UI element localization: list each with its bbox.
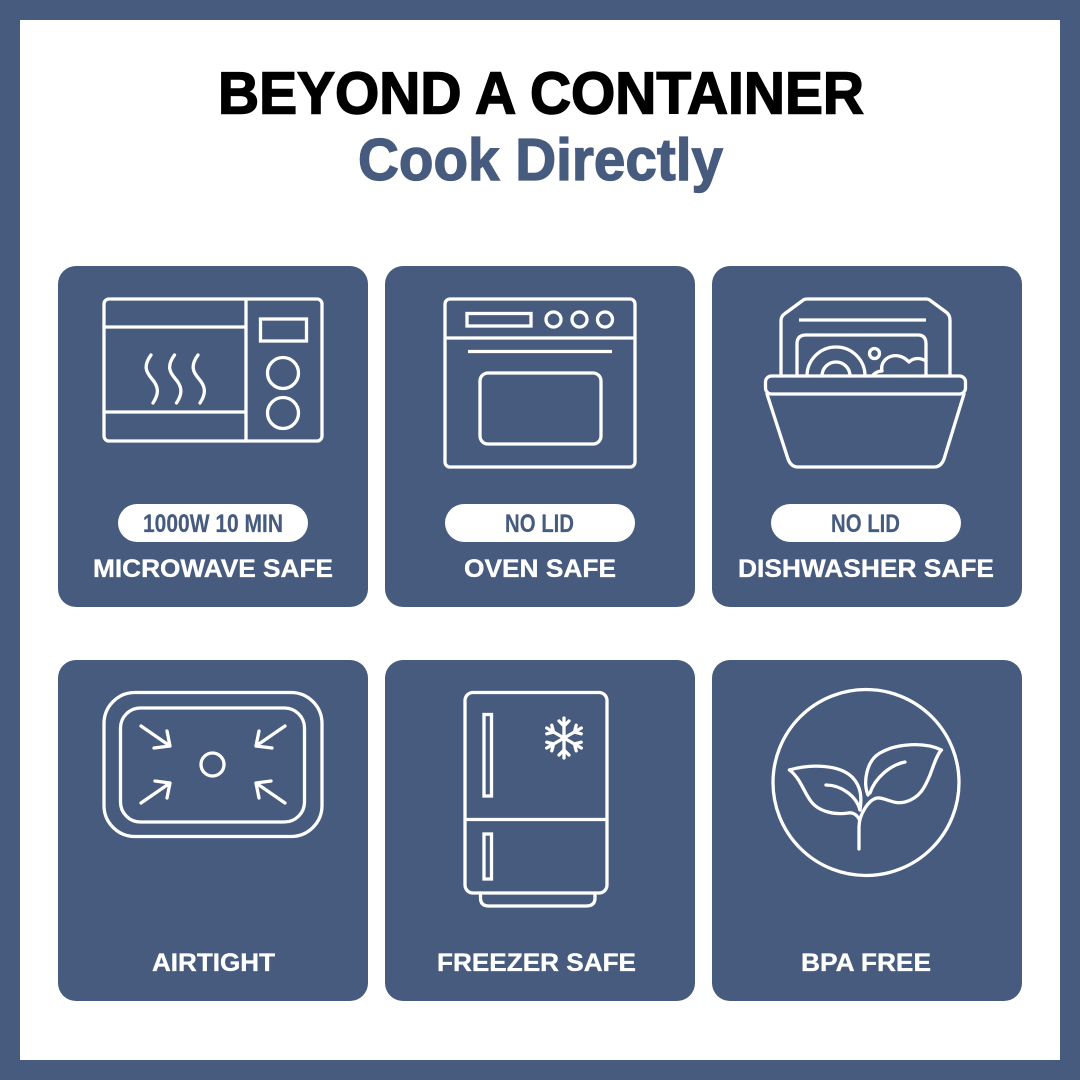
pill: no lid: NO LID: [831, 510, 900, 538]
label: oven safe: OVEN SAFE: [464, 555, 616, 583]
panel: freezer safe: [385, 660, 695, 1001]
title: BEYOND A CONTAINER: [218, 60, 864, 126]
title: Cook Directly: [358, 127, 723, 193]
pill: 1000W 10 MIN: [118, 504, 308, 542]
label: microwave safe: MICROWAVE SAFE: [93, 555, 333, 583]
icon: snowflake: [544, 718, 584, 758]
panel: microwave safe: [58, 266, 368, 607]
icon: dishwasher: [766, 299, 966, 467]
pill: 1000W 10 MIN: 1000W 10 MIN: [143, 510, 283, 538]
panel: dishwasher safe: [712, 266, 1022, 607]
pill: no lid: [445, 504, 635, 542]
pill: no lid: NO LID: [505, 510, 574, 538]
label: airtight: AIRTIGHT: [152, 949, 275, 977]
label: freezer safe: FREEZER SAFE: [437, 949, 636, 977]
icon: microwave: [104, 299, 322, 441]
icon: oven: [445, 299, 635, 467]
label: bpa free: BPA FREE: [801, 949, 931, 977]
icon: leaf in circle: [773, 690, 959, 876]
label: dishwasher safe: DISHWASHER SAFE: [738, 555, 994, 583]
icon: refrigerator: [465, 692, 607, 906]
panel: bpa free: [712, 660, 1022, 1001]
panel: oven safe: [385, 266, 695, 607]
title: [218, 60, 864, 193]
panel: airtight: [58, 660, 368, 1001]
pill: no lid: [771, 504, 961, 542]
icon: airtight container: [104, 692, 322, 836]
